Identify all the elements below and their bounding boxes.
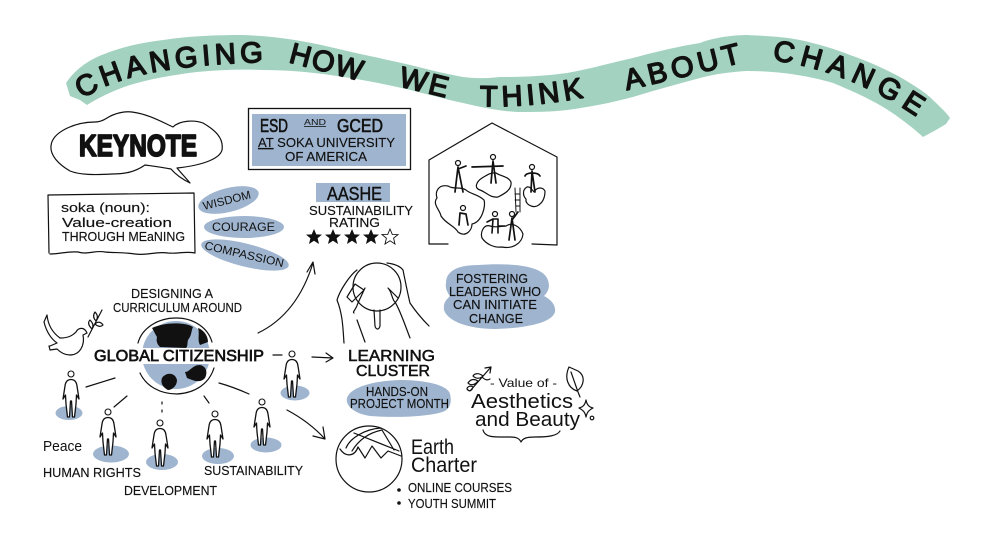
- title banner: [66, 35, 950, 137]
- callout text: CAN INITIATE: [453, 297, 537, 312]
- sprig icon: [467, 367, 491, 391]
- hands-on project month pill: PROJECT MONTH: [350, 396, 449, 411]
- pill: wisdom: WISDOM: [202, 189, 252, 213]
- fostering leaders callout: [444, 264, 555, 329]
- ESD heading: [260, 116, 383, 136]
- definition text: [61, 200, 185, 244]
- soka definition box: [48, 193, 195, 254]
- pill: courage: COURAGE: [212, 222, 275, 234]
- hands-on project month pill: [347, 380, 451, 417]
- sparkle icon: [579, 400, 593, 417]
- callout text: CHANGE: [469, 311, 523, 326]
- figure: human rights: [93, 409, 129, 462]
- arrow: to learning cluster: [312, 353, 333, 362]
- arrow: to AASHE: [258, 262, 315, 333]
- aesthetics text: and Beauty: [475, 409, 580, 431]
- label: sustainability: SUSTAINABILITY: [204, 463, 303, 478]
- stars: [306, 229, 398, 244]
- designing a curriculum heading: CURRICULUM AROUND: [113, 300, 242, 315]
- label: development: DEVELOPMENT: [124, 483, 217, 498]
- global citizenship label: GLOBAL CITIZENSHIP: [94, 348, 264, 365]
- ESD heading: ESD: [260, 116, 288, 136]
- figure: fifth person: [250, 399, 282, 452]
- hands-on project month pill: HANDS-ON: [366, 384, 428, 399]
- earth charter list: [397, 480, 512, 511]
- AASHE rating: [306, 183, 413, 244]
- figure: sustainability: [202, 411, 234, 464]
- university text: AT SOKA UNIVERSITY: [258, 135, 395, 150]
- earth charter list: ONLINE COURSES: [408, 480, 512, 495]
- designing a curriculum heading: DESIGNING A: [131, 286, 213, 301]
- figure: development: [146, 420, 178, 470]
- globe: [138, 318, 214, 394]
- callout text: FOSTERING: [456, 271, 528, 286]
- figures: [455, 154, 540, 240]
- aesthetics text: - Value of -: [490, 376, 557, 390]
- rating label: [309, 203, 413, 230]
- learning cluster heading: LEARNING: [348, 348, 435, 365]
- earth charter logo: [336, 426, 402, 492]
- arrow: to earth charter: [287, 410, 325, 439]
- hands holding clay sphere: [337, 263, 429, 343]
- keynote speech bubble: [51, 112, 222, 183]
- definition text: Value-creation: [62, 215, 172, 230]
- pill: wisdom: [196, 181, 261, 219]
- label: peace: Peace: [43, 439, 82, 455]
- designing a curriculum heading: [113, 286, 242, 315]
- university text: OF AMERICA: [285, 149, 367, 164]
- figure: citizen: [280, 351, 310, 400]
- callout text: [449, 271, 541, 326]
- earth charter list: YOUTH SUMMIT: [408, 496, 496, 511]
- ESD heading: AND: [304, 118, 326, 127]
- leaf icon: [567, 367, 583, 397]
- pill: compassion: [199, 233, 291, 277]
- earth charter wordmark: Earth: [411, 436, 454, 459]
- callout text: LEADERS WHO: [449, 284, 541, 299]
- AASHE rating: AASHE: [327, 184, 382, 204]
- rating label: RATING: [329, 215, 380, 230]
- university text: [258, 135, 395, 164]
- definition text: THROUGH MEaNING: [62, 229, 185, 244]
- house of people on islands: [429, 123, 557, 247]
- aesthetics text: [471, 376, 580, 431]
- icon: dove with olive branch: [44, 310, 103, 355]
- pill: courage: [204, 216, 284, 238]
- figure: peace: [56, 371, 82, 420]
- connector lines: [86, 355, 282, 412]
- learning cluster heading: [348, 348, 435, 380]
- rating label: SUSTAINABILITY: [309, 203, 413, 218]
- earth charter wordmark: Charter: [411, 454, 477, 477]
- aesthetics text: Aesthetics: [471, 391, 573, 413]
- value of aesthetics and beauty: [467, 367, 594, 442]
- ESD heading: GCED: [337, 116, 383, 136]
- definition text: soka (noun):: [61, 200, 150, 215]
- earth charter wordmark: [411, 436, 477, 477]
- globe with global citizenship: [94, 318, 264, 394]
- title text: CHANGING HOW WE THINK ABOUT CHANGE: [76, 40, 927, 117]
- brace: [483, 430, 560, 442]
- keynote label: KEYNOTE: [79, 128, 197, 163]
- label: human rights: HUMAN RIGHTS: [43, 465, 141, 480]
- panel: ESD and GCED: [248, 108, 410, 170]
- learning cluster heading: CLUSTER: [356, 363, 430, 380]
- dot: [590, 416, 594, 420]
- pill: compassion: COMPASSION: [203, 240, 285, 270]
- islands: [435, 173, 545, 247]
